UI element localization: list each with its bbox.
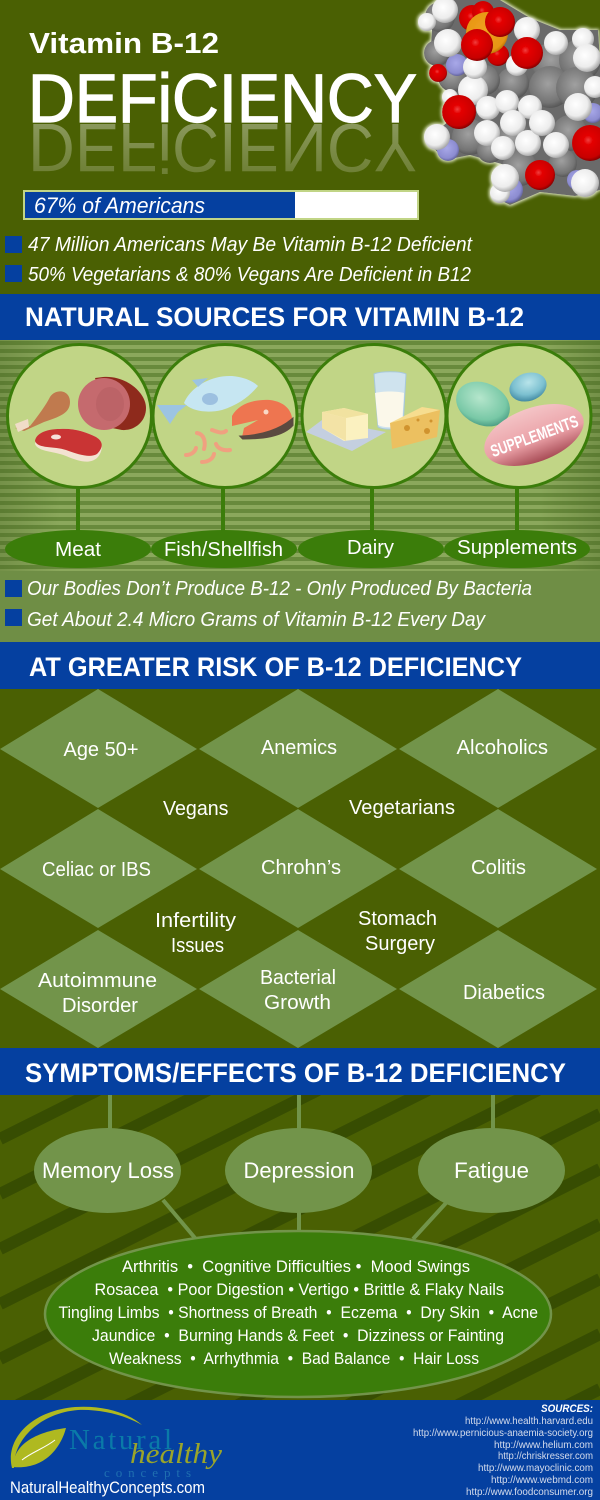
other symptoms oval: Weakness • Arrhythmia • Bad Balance • Hair Loss	[109, 1349, 479, 1368]
heading: at greater risk: AT GREATER RISK OF B-12 DEFICIENCY	[29, 652, 522, 682]
progress bar: 67% of Americans: 67% of Americans	[34, 193, 205, 218]
risk labels: Issues	[171, 935, 224, 957]
icon: cheese	[390, 407, 440, 449]
panel: natural sources	[0, 340, 600, 642]
risk labels: Bacterial	[260, 967, 336, 989]
other symptoms oval: Rosacea • Poor Digestion • Vertigo • Brittle & Flaky Nails	[94, 1280, 504, 1299]
symptom: memory loss	[34, 1128, 181, 1213]
label: supplements: Supplements	[457, 537, 577, 559]
logo leaf	[13, 1428, 66, 1467]
circle: fish and shellfish	[153, 344, 297, 488]
label: meat	[5, 530, 151, 568]
sources list: http://www.webmd.com	[491, 1475, 593, 1486]
label: meat: Meat	[55, 539, 101, 561]
icon: fish	[157, 376, 258, 424]
risk labels: Alcoholics	[456, 737, 548, 759]
icon: salmon steak	[232, 400, 292, 438]
sources list: http://www.pernicious-anaemia-society.org	[413, 1428, 593, 1439]
panel: risk diamonds	[0, 689, 597, 1048]
circle: supplements	[447, 344, 592, 488]
stat: vegetarians and vegans: 50% Vegetarians & 80% Vegans Are Deficient in B12	[28, 263, 472, 286]
risk labels: Disorder	[62, 995, 138, 1017]
risk labels: Chrohn’s	[261, 857, 341, 879]
stat: 47 million: 47 Million Americans May Be Vitamin B-12 Deficient	[28, 233, 473, 256]
icon: drumstick	[15, 391, 70, 432]
risk labels: Celiac or IBS	[42, 859, 151, 881]
fact: produced by bacteria: Our Bodies Don’t Produce B-12 - Only Produced By Bacteria	[27, 577, 532, 600]
icon: ham	[78, 377, 146, 430]
risk labels: Autoimmune	[38, 970, 157, 992]
logo: NaturalHealthyConcepts.com	[10, 1479, 205, 1497]
sources list	[413, 1403, 593, 1498]
icon: steak	[35, 429, 102, 462]
logo swoosh	[11, 1407, 142, 1468]
label: dairy: Dairy	[347, 537, 394, 559]
symptom: depression	[225, 1128, 372, 1213]
title reflection: DEFiCIENCY	[28, 109, 417, 186]
icon: supplement pill	[476, 392, 592, 478]
risk labels: Surgery	[365, 933, 435, 955]
risk labels: Age 50+	[64, 739, 138, 761]
heading: natural sources: NATURAL SOURCES FOR VITAMIN B-12	[25, 302, 524, 332]
sources list: http://chriskresser.com	[498, 1451, 593, 1462]
other symptoms oval: Arthritis • Cognitive Difficulties • Mood Swings	[122, 1257, 470, 1276]
risk labels: Growth	[264, 992, 331, 1014]
stems	[78, 486, 517, 532]
circle: meat	[8, 344, 152, 488]
footer	[0, 1400, 600, 1500]
icon: blue capsule	[506, 368, 550, 406]
icon: shrimp	[186, 430, 230, 462]
risk labels: Vegetarians	[349, 797, 455, 819]
risk labels: Infertility	[155, 910, 236, 932]
icon: milk glass	[374, 372, 406, 429]
sources list: http://www.mayoclinic.com	[478, 1463, 593, 1474]
label: supplements	[444, 530, 590, 568]
sources list: http://www.helium.com	[494, 1440, 593, 1451]
sources list: http://www.foodconsumer.org	[466, 1487, 593, 1498]
logo: healthy	[130, 1439, 223, 1470]
risk labels: Diabetics	[463, 982, 545, 1004]
diamonds	[0, 689, 597, 1048]
other symptoms oval: Tingling Limbs • Shortness of Breath • Eczema • Dry Skin • Acne	[58, 1303, 538, 1322]
sources list: http://www.health.harvard.edu	[465, 1416, 593, 1427]
molecule illustration	[418, 0, 600, 205]
progress bar: 67% of Americans	[24, 191, 418, 219]
label: dairy	[298, 530, 444, 568]
other symptoms oval	[45, 1231, 551, 1397]
panel: symptoms	[0, 1090, 600, 1405]
fact: daily amount: Get About 2.4 Micro Grams of Vitamin B-12 Every Day	[27, 608, 487, 631]
icon: butter	[322, 408, 368, 441]
sources list: SOURCES:	[541, 1403, 593, 1415]
heading: symptoms	[0, 1048, 600, 1095]
header: title	[28, 28, 417, 186]
other symptoms oval: Jaundice • Burning Hands & Feet • Dizziness or Fainting	[92, 1326, 504, 1345]
icon: plate	[306, 420, 386, 451]
symptom: fatigue: Fatigue	[454, 1158, 529, 1183]
heading: symptoms: SYMPTOMS/EFFECTS OF B-12 DEFICIENCY	[25, 1058, 566, 1088]
heading: natural sources	[0, 294, 600, 340]
icon: green capsule	[449, 373, 517, 435]
title: Deficiency: DEFiCIENCY	[28, 60, 417, 137]
label: fish and shellfish	[151, 530, 297, 568]
symptom: memory loss: Memory Loss	[42, 1158, 174, 1183]
logo: concepts	[104, 1465, 191, 1480]
circle: dairy	[302, 344, 446, 488]
risk labels: Anemics	[261, 737, 337, 759]
risk labels	[38, 737, 548, 1017]
label: fish and shellfish: Fish/Shellfish	[164, 539, 283, 561]
logo	[10, 1407, 223, 1497]
risk labels: Colitis	[471, 857, 526, 879]
logo: Natural	[69, 1424, 172, 1456]
risk labels: Stomach	[358, 908, 437, 930]
symptom: fatigue	[418, 1128, 565, 1213]
title: Vitamin B-12: Vitamin B-12	[29, 28, 219, 60]
connectors	[110, 1095, 493, 1239]
symptom: depression: Depression	[244, 1158, 354, 1183]
risk labels: Vegans	[163, 798, 228, 820]
heading: at greater risk	[0, 642, 600, 689]
